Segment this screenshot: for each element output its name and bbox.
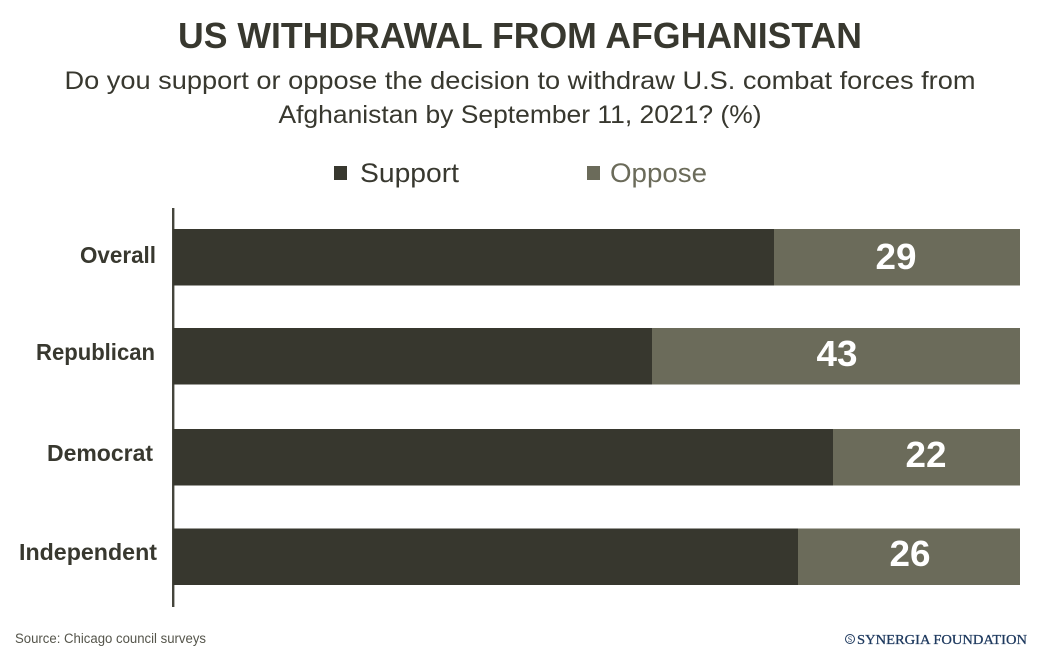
row: Independent: 26: [890, 533, 930, 574]
row: Democrat: Democrat: [47, 440, 153, 466]
legend: support: Support: [360, 158, 460, 188]
logo: Synergia Foundation: SYNERGIA FOUNDATION: [857, 633, 1027, 648]
row: Overall: 29: [876, 236, 916, 277]
logo: Synergia Foundation: S: [848, 635, 852, 644]
row: Republican: 43: [816, 333, 858, 374]
subtitle: Afghanistan by September 11, 2021? (%): [278, 101, 762, 129]
row: Republican: Republican: [36, 339, 155, 365]
chart axis: [172, 208, 174, 607]
row: Overall: [80, 229, 1020, 286]
row: Republican: [36, 328, 1020, 384]
source note: Source: Chicago council surveys: [15, 631, 206, 646]
row: Democrat: 22: [906, 434, 946, 475]
legend: oppose: Oppose: [610, 158, 707, 188]
row: Democrat: [47, 429, 1020, 486]
row: Independent: Independent: [19, 539, 157, 565]
row: Independent: [19, 528, 1020, 585]
title: US WITHDRAWAL FROM AFGHANISTAN: [178, 15, 862, 56]
subtitle: [64, 67, 976, 129]
row: Overall: Overall: [80, 242, 156, 268]
subtitle: Do you support or oppose the decision to withdraw U.S. combat forces from: [64, 67, 976, 95]
legend: [334, 158, 707, 188]
